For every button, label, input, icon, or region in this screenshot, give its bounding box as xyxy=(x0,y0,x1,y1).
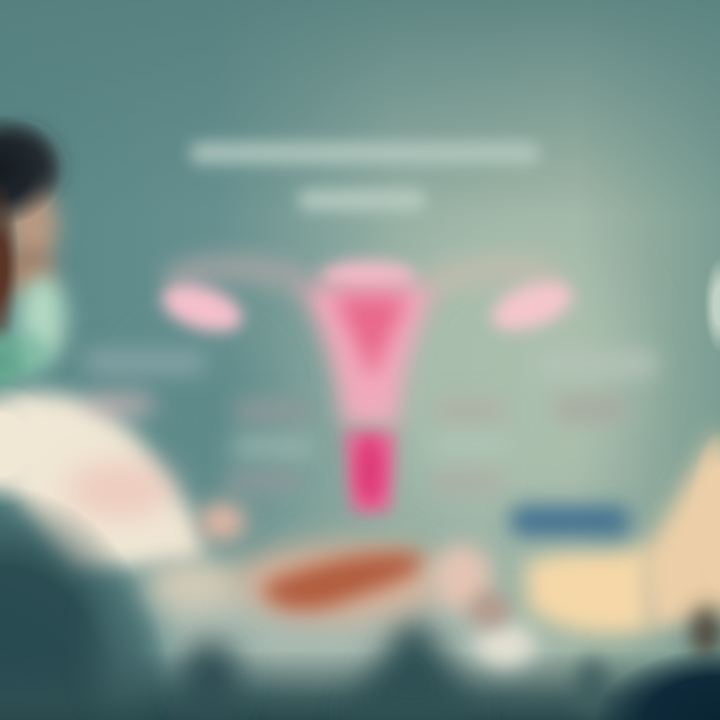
hair edge xyxy=(0,114,62,226)
dark fold at centre-left xyxy=(180,640,240,720)
forearm shadow xyxy=(692,606,720,658)
cervix core xyxy=(356,436,384,504)
neck edge xyxy=(0,178,20,358)
uterine body xyxy=(300,285,436,425)
arm xyxy=(640,425,720,630)
right figure: patient xyxy=(510,257,720,720)
surgical mask xyxy=(18,274,66,362)
beige cuff xyxy=(145,559,245,611)
patient hand xyxy=(525,545,650,634)
face xyxy=(6,185,58,265)
gown edge xyxy=(0,383,60,507)
label bars (illegible, blurred in reference) xyxy=(85,350,655,492)
uterine cavity xyxy=(334,296,408,380)
dark spire xyxy=(340,610,480,720)
left figure: doctor xyxy=(0,114,246,570)
white cloth xyxy=(475,623,535,667)
left fallopian tube xyxy=(170,268,310,285)
right fallopian tube xyxy=(430,270,555,285)
gown xyxy=(10,392,203,570)
cervix xyxy=(344,432,396,512)
right ovary xyxy=(485,272,579,340)
edge highlight xyxy=(704,257,720,353)
blue garment xyxy=(510,506,630,536)
left ovary xyxy=(156,275,248,341)
dark bottom band xyxy=(0,650,720,720)
title (illegible, blurred in reference) xyxy=(190,142,540,210)
diagram: uterus xyxy=(156,260,579,512)
gown pink tint xyxy=(65,462,175,518)
bottom drapery xyxy=(0,485,720,720)
mask edge xyxy=(0,326,30,398)
doctor palm halo xyxy=(235,544,445,620)
folds xyxy=(94,590,146,710)
pale cloth xyxy=(150,573,560,695)
arm edge xyxy=(688,430,720,630)
patient fingers xyxy=(432,544,492,612)
fundus highlight xyxy=(320,260,416,292)
hair xyxy=(0,132,56,204)
clasped hands xyxy=(145,544,650,634)
dark garment corner xyxy=(595,648,720,720)
dark left corner xyxy=(0,485,175,720)
doctor hand xyxy=(262,552,424,610)
